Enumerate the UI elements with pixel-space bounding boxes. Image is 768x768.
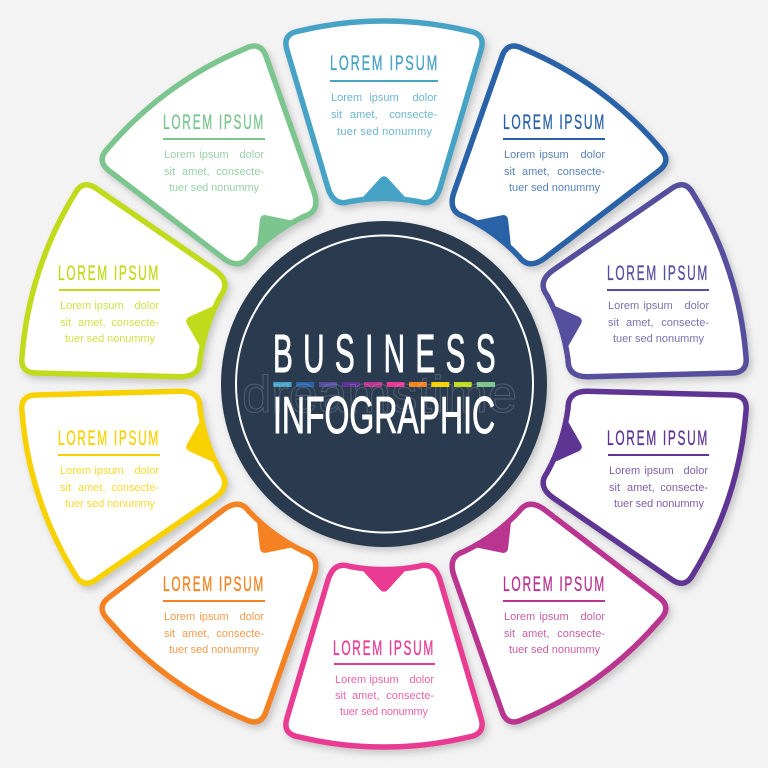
segment shape [91,473,357,735]
text block: ipsum [199,611,229,623]
text block: dolor [581,149,605,161]
dark disc [221,221,547,547]
text block: ipsum [539,149,569,161]
panel: indigo [526,178,760,421]
text block: LOREM IPSUM [58,262,160,285]
text block: tuer sed nonummy [169,182,260,194]
text block: LOREM IPSUM [58,427,160,450]
text block: ipsum [644,465,674,477]
text block: LOREM IPSUM [330,52,439,75]
text block: consecte- [111,482,159,494]
text block: dolor [685,300,709,312]
text block: LOREM IPSUM [503,573,606,596]
text block: tuer sed nonummy [509,182,600,194]
text block [163,111,265,194]
text block: dolor [240,149,264,161]
text block: Lorem [164,611,195,623]
text block: amet, [522,166,550,178]
text block: ipsum [199,149,229,161]
text block: sit [504,166,515,178]
panel: orange [91,473,357,735]
text block: dolor [581,611,605,623]
text block: dolor [684,465,708,477]
text block [503,573,606,656]
text block: ipsum [369,92,399,104]
text block: amet, [350,109,378,121]
title: business: BUSINESS [273,325,506,384]
segment shape [8,178,242,421]
text block: consecte- [216,628,264,640]
text block: ipsum [643,300,673,312]
text block: Lorem [335,674,366,686]
text block: LOREM IPSUM [163,111,265,134]
text block: sit [608,317,619,329]
text block: amet, [627,482,655,494]
text block: tuer sed nonummy [613,333,704,345]
text block: amet, [182,628,210,640]
panel: lime [8,178,242,421]
text block: ipsum [369,674,399,686]
text block: LOREM IPSUM [163,573,265,596]
text block: amet, [626,317,654,329]
text block: Lorem [60,300,91,312]
text block: amet, [352,690,380,702]
text block: Lorem [504,149,535,161]
segment shape [286,565,482,747]
text block: consecte- [660,482,708,494]
text block [330,52,439,138]
text block: dolor [410,674,434,686]
text block [607,262,709,345]
text block: Lorem [164,149,195,161]
text block: Lorem [331,92,362,104]
text block: dolor [135,465,159,477]
segment shape [526,347,760,590]
panel: green [91,33,357,295]
text block: tuer sed nonummy [65,333,156,345]
text block: sit [164,628,175,640]
text block [58,427,160,510]
text block [333,637,435,718]
center circle [221,221,547,547]
text block: LOREM IPSUM [333,637,435,660]
text block: sit [164,166,175,178]
text block: dolor [413,92,437,104]
panel: pink [286,565,482,747]
text block: amet, [78,317,106,329]
text block: tuer sed nonummy [509,644,600,656]
text block [503,111,606,194]
segment shape [411,473,677,735]
panel: top blue [286,21,482,203]
text block: tuer sed nonummy [65,498,156,510]
text block: Lorem [504,611,535,623]
text block: consecte- [389,109,437,121]
segment shape [8,347,242,590]
text block: sit [504,628,515,640]
segment shape [91,33,357,295]
text block: consecte- [386,690,434,702]
colour bar strip [273,382,495,387]
text block [58,262,160,345]
text block: dolor [240,611,264,623]
text block: dolor [135,300,159,312]
text block: tuer sed nonummy [169,644,260,656]
text block: sit [609,482,620,494]
text block: Lorem [60,465,91,477]
panel: dark blue [411,33,677,295]
text block: consecte- [557,166,605,178]
text block: Lorem [608,300,639,312]
text block: sit [335,690,346,702]
text block: ipsum [94,465,124,477]
panel: purple [526,347,760,590]
text block: amet, [78,482,106,494]
segment shape [286,21,482,203]
text block: ipsum [94,300,124,312]
text block [163,573,265,656]
text block: sit [60,482,71,494]
text block: consecte- [557,628,605,640]
segment shape [526,178,760,421]
text block: amet, [182,166,210,178]
text block: consecte- [661,317,709,329]
text block: Lorem [609,465,640,477]
text block: tuer sed nonummy [340,706,428,718]
watermark: dreamstime [242,366,517,424]
text block [607,427,709,510]
text block: amet, [522,628,550,640]
text block: consecte- [111,317,159,329]
panel: yellow [8,347,242,590]
text block: ipsum [539,611,569,623]
text block: sit [60,317,71,329]
text block: consecte- [216,166,264,178]
text block: LOREM IPSUM [503,111,606,134]
title: infographic: INFOGRAPHIC [273,387,495,445]
white ring [236,236,533,532]
text block: sit [331,109,342,121]
text block: tuer sed nonummy [337,126,432,138]
panel: magenta [411,473,677,735]
text block: tuer sed nonummy [614,498,704,510]
segment shape [411,33,677,295]
